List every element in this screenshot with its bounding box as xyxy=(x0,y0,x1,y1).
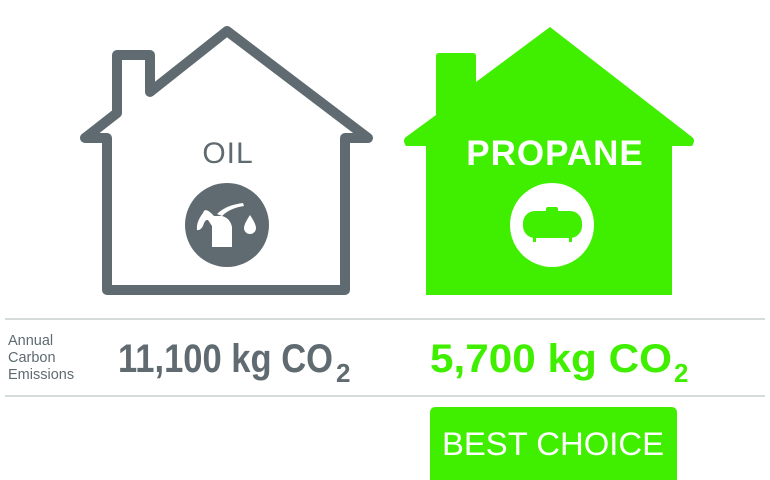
house outline xyxy=(85,31,368,290)
icon: oil can xyxy=(185,183,269,267)
row label: annual carbon emissions: Carbon xyxy=(8,350,56,366)
house shape xyxy=(404,27,694,295)
badge: best choice xyxy=(430,407,677,480)
label: PROPANE: PROPANE xyxy=(466,134,644,173)
row label: annual carbon emissions xyxy=(8,333,74,383)
value: oil emissions: 2 xyxy=(336,358,350,388)
house: oil xyxy=(85,31,368,290)
label: OIL: OIL xyxy=(202,137,254,170)
icon: propane tank xyxy=(510,183,594,267)
row label: annual carbon emissions: Emissions xyxy=(8,367,74,383)
badge: best choice: BEST CHOICE xyxy=(442,426,664,462)
house: propane xyxy=(404,27,694,295)
row label: annual carbon emissions: Annual xyxy=(8,333,53,349)
value: oil emissions: 11,100 kg CO xyxy=(118,337,333,381)
value: propane emissions: 5,700 kg CO xyxy=(430,337,672,381)
value: propane emissions: 2 xyxy=(674,358,688,388)
divider lines xyxy=(5,318,765,320)
